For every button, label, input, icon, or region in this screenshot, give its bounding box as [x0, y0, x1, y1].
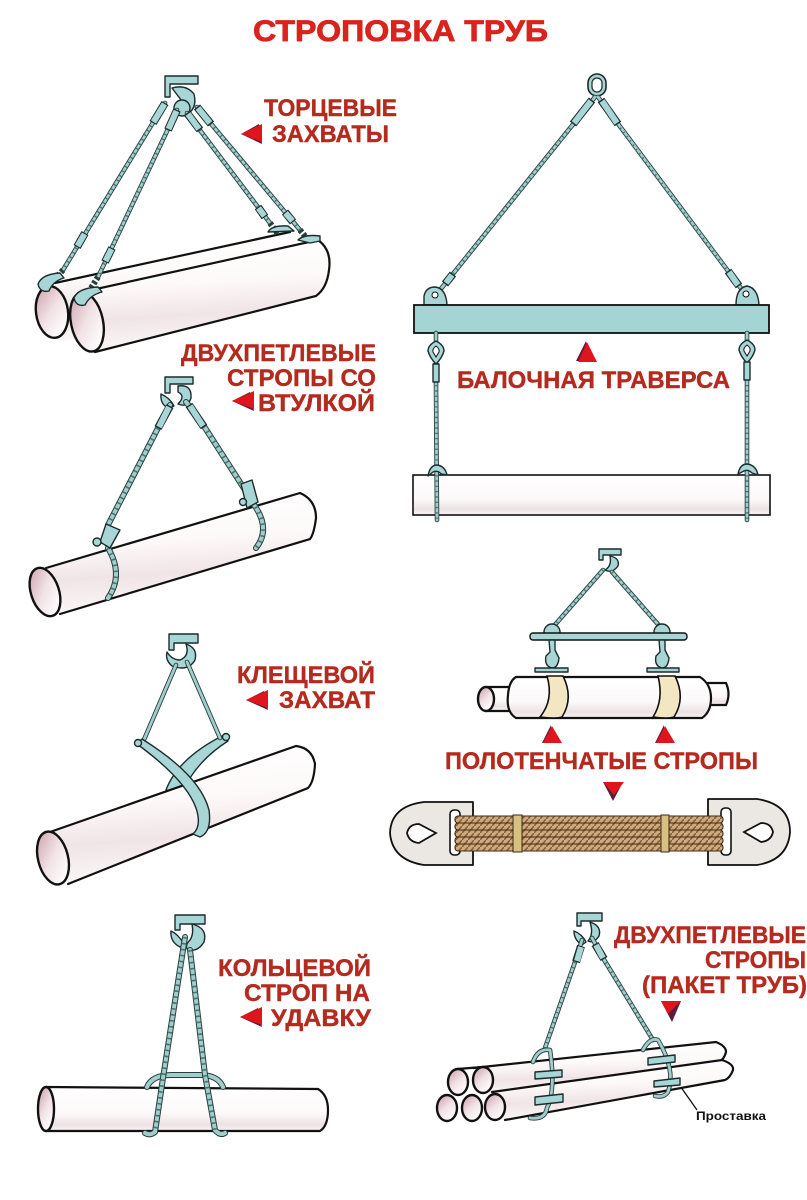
panel: choke ring sling: [38, 915, 328, 1134]
rods: [143, 662, 220, 742]
beam lugs: [424, 286, 759, 305]
arrow: [655, 725, 675, 743]
crane hook: [167, 634, 198, 668]
shackles: [535, 640, 679, 672]
panel: tongs grip: [32, 634, 315, 888]
crane hook: [171, 915, 205, 950]
label: towel slings: ПОЛОТЕНЧАТЫЕ СТРОПЫ: [445, 748, 758, 775]
label: double loop slings: ВТУЛКОЙ: [258, 389, 375, 417]
pipe: [24, 493, 316, 620]
label: choke ring sling: КОЛЬЦЕВОЙ: [218, 954, 371, 982]
left eye plate: [390, 802, 473, 865]
label: end grips: ЗАХВАТЫ: [272, 121, 389, 148]
label: double loop slings: СТРОПЫ СО: [227, 365, 376, 392]
towel bands: [540, 676, 680, 718]
ropes: [530, 938, 670, 1118]
lower ropes: [428, 333, 755, 520]
ring rope: [145, 937, 225, 1134]
arrow: [542, 725, 562, 743]
upper ropes: [436, 97, 746, 295]
top ring: [588, 74, 606, 96]
label: double loop slings: [181, 340, 376, 417]
label: choke ring sling: [218, 954, 372, 1032]
yoke bar: [530, 633, 687, 640]
strands: [455, 816, 723, 851]
label: towel slings: [445, 725, 758, 801]
spacers: [535, 1055, 680, 1105]
pipe hooks: [428, 464, 758, 476]
label: end grips: ТОРЦЕВЫЕ: [264, 95, 397, 122]
pipe: [478, 677, 728, 718]
panel: towel slings on pipe: [478, 549, 728, 718]
spacer caption: Проставка: [696, 1109, 766, 1123]
top ring opening: [592, 78, 602, 92]
crane hook: [599, 549, 621, 571]
yoke eyes: [544, 624, 670, 640]
label: choke ring sling: СТРОП НА: [244, 980, 370, 1007]
panel: end grips: [33, 76, 330, 355]
leader line: [678, 1083, 697, 1110]
arrow: [603, 782, 624, 801]
label: tongs grip: [237, 661, 375, 714]
ropes: [553, 570, 663, 630]
right eye plate: [708, 799, 790, 865]
arrow: [661, 1001, 681, 1022]
crane hook: [165, 76, 198, 116]
arrow: [232, 391, 254, 411]
crane hook: [161, 377, 193, 408]
label: choke ring sling: УДАВКУ: [271, 1005, 372, 1032]
panel: towel sling detail: [390, 799, 790, 865]
label: tongs grip: ЗАХВАТ: [279, 687, 375, 714]
arrow: [240, 1007, 262, 1027]
panel: double loop slings: [24, 377, 316, 620]
pipe pair: [33, 232, 330, 355]
label: beam traverse: БАЛОЧНАЯ ТРАВЕРСА: [457, 367, 730, 394]
tong far arm: [166, 735, 228, 795]
beam: [414, 305, 769, 333]
label: pipe bundle: (ПАКЕТ ТРУБ): [642, 972, 807, 999]
strand ties: [513, 815, 669, 852]
panel: pipe bundle: [437, 913, 766, 1123]
panel: beam traverse: [413, 74, 770, 520]
ropes: [108, 402, 245, 525]
four ropes: [50, 103, 308, 296]
arrow: [246, 690, 268, 710]
label: tongs grip: КЛЕЩЕВОЙ: [237, 661, 375, 689]
pipe: [38, 1087, 328, 1131]
pipe: [32, 746, 315, 888]
label: beam traverse: [457, 341, 730, 394]
title: СТРОПОВКА ТРУБ: [253, 15, 548, 48]
label: double loop slings: ДВУХПЕТЛЕВЫЕ: [181, 340, 376, 367]
label: end grips: [241, 95, 397, 148]
arrow: [576, 341, 597, 362]
pipes: [437, 1042, 733, 1121]
pipe: [413, 475, 770, 515]
arrow: [241, 124, 262, 144]
sleeves and loops: [93, 480, 263, 598]
crane hook: [574, 913, 602, 945]
label: pipe bundle: [614, 922, 807, 1022]
end grips: [38, 226, 320, 305]
tong near arm: [137, 739, 210, 837]
